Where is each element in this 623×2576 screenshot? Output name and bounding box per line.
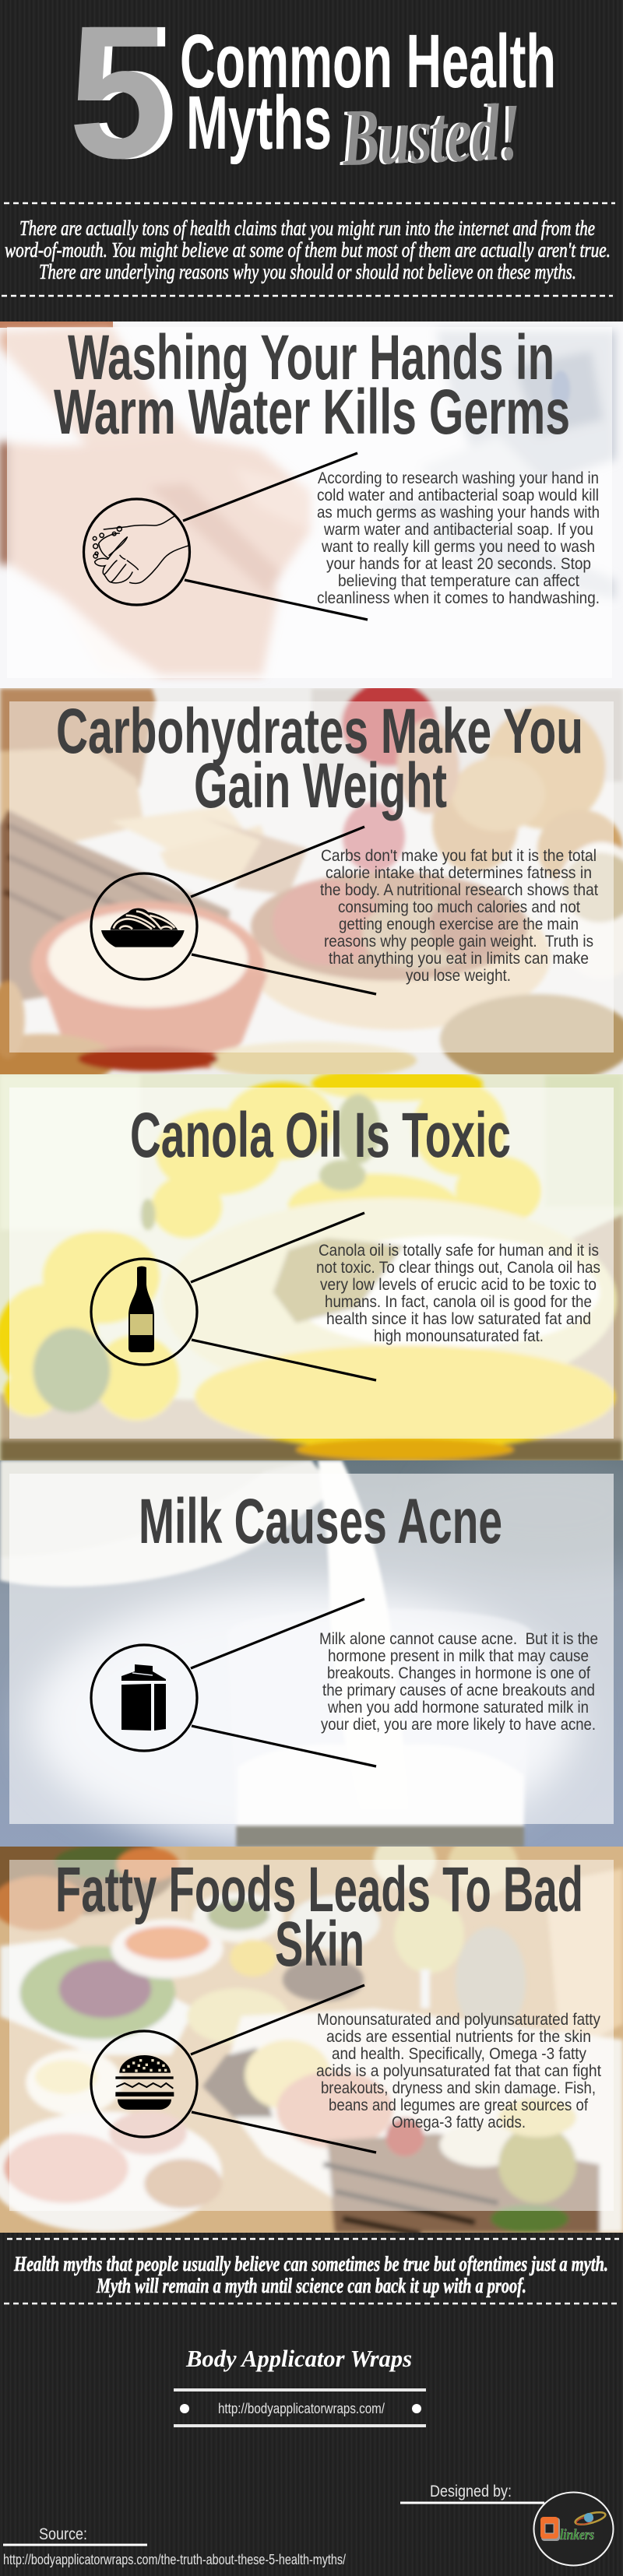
title (69, 0, 556, 198)
panel: carbohydrates (0, 681, 623, 1087)
callout lines (191, 1599, 376, 1766)
body text: cold water and antibacterial soap would kill (317, 487, 599, 504)
body text: want to really kill germs you need to wash (321, 538, 595, 556)
source: Source: (39, 2525, 87, 2543)
icon: oil bottle (91, 1259, 197, 1365)
photo: canola flowers and oil bowl (0, 1067, 623, 1462)
body text: acids are essential nutrients for the skin (326, 2028, 591, 2046)
translucent overlay (9, 1860, 614, 2211)
photo: soapy hands at faucet (0, 322, 623, 688)
website url: http://bodyapplicatorwraps.com/ (218, 2401, 385, 2416)
body text: Monounsaturated and polyunsaturated fatty (317, 2011, 600, 2029)
panel: washing hands (0, 322, 623, 688)
body text: humans. In fact, canola oil is good for the (325, 1293, 592, 1311)
heading: Gain Weight (194, 750, 447, 821)
title word: Busted!: Busted! (340, 87, 523, 183)
photo: bread, rice, pasta and potatoes (0, 681, 623, 1087)
body text: that anything you eat in limits can make (329, 950, 589, 968)
bullet dot left (180, 2404, 189, 2413)
body text: health since it has low saturated fat and (326, 1310, 591, 1328)
body text (320, 847, 598, 985)
logo: Dlinkers (534, 2493, 614, 2566)
body text (316, 1242, 600, 1345)
callout lines (191, 1213, 376, 1380)
body text: and health. Specifically, Omega -3 fatty (332, 2045, 586, 2063)
heading (54, 322, 570, 448)
body text: the primary causes of acne breakouts and (322, 1682, 595, 1699)
logo: Dlinkers: linkers (560, 2527, 594, 2543)
body text: Omega-3 fatty acids. (392, 2114, 526, 2131)
body text: not toxic. To clear things out, Canola oil has (316, 1259, 600, 1277)
body text: you lose weight. (406, 967, 511, 985)
body text: believing that temperature can affect (338, 572, 579, 590)
translucent overlay (7, 327, 612, 678)
body text: very low levels of erucic acid to be toxic to (320, 1276, 597, 1294)
body text: warm water and antibacterial soap. If you (323, 521, 593, 539)
body text: Carbs don't make you fat but it is the total (321, 847, 597, 865)
icon: washing hands circle (84, 499, 190, 605)
body text: the body. A nutritional research shows that (320, 881, 598, 899)
body text: getting enough exercise are the main (339, 915, 579, 933)
callout lines (191, 827, 376, 994)
icon: noodle bowl (91, 873, 197, 979)
body text: calorie intake that determines fatness in (326, 864, 592, 882)
body text: Milk alone cannot cause acne. But it is the (319, 1630, 598, 1648)
body text: acids is a polyunsaturated fat that can fight (316, 2062, 601, 2080)
heading (56, 696, 583, 821)
source: http://bodyapplicatorwraps.com/the-truth-about-these-5-health-myths/ (3, 2552, 346, 2567)
body text: your hands for at least 20 seconds. Stop (326, 555, 591, 573)
body text: breakouts. Changes in hormone is one of (327, 1664, 590, 1682)
panel: milk (0, 1456, 623, 1853)
brand name: Body Applicator Wraps (185, 2345, 412, 2372)
heading: Skin (275, 1909, 364, 1980)
body text: when you add hormone saturated milk in (327, 1699, 589, 1717)
body text: reasons why people gain weight. Truth is (324, 933, 593, 951)
body text (317, 469, 600, 607)
closing text (13, 2252, 608, 2297)
callout lines (183, 453, 368, 620)
body text: consuming too much calories and not (338, 898, 580, 916)
callout lines (191, 1985, 376, 2153)
panel: canola oil (0, 1067, 623, 1462)
heading (55, 1854, 583, 1980)
body text: beans and legumes are great sources of (329, 2096, 588, 2114)
translucent overlay (9, 1474, 614, 1824)
title line: Myths: Myths (186, 80, 332, 165)
body text (319, 1630, 598, 1734)
body text: high monounsaturated fat. (374, 1327, 544, 1345)
intro text (5, 216, 611, 283)
icon: milk carton (91, 1645, 197, 1751)
body text (316, 2011, 601, 2131)
panel: fatty foods (0, 1829, 623, 2234)
brand block (174, 2345, 426, 2426)
translucent overlay (9, 1088, 614, 1439)
body text: cleanliness when it comes to handwashing. (317, 589, 600, 607)
source (3, 2525, 346, 2567)
photo: table of cold cuts, salad and sauces (0, 1829, 623, 2234)
photo: milk poured into glass (0, 1456, 623, 1853)
title word: Busted! (337, 87, 523, 183)
body text: Canola oil is totally safe for human and it is (319, 1242, 599, 1260)
translucent overlay (9, 701, 614, 1053)
bullet dot right (412, 2404, 421, 2413)
title word: Busted!: Busted! (337, 87, 519, 183)
body text: hormone present in milk that may cause (328, 1647, 589, 1665)
icon: burger (91, 2031, 197, 2137)
designed by: Designed by: (430, 2483, 512, 2500)
